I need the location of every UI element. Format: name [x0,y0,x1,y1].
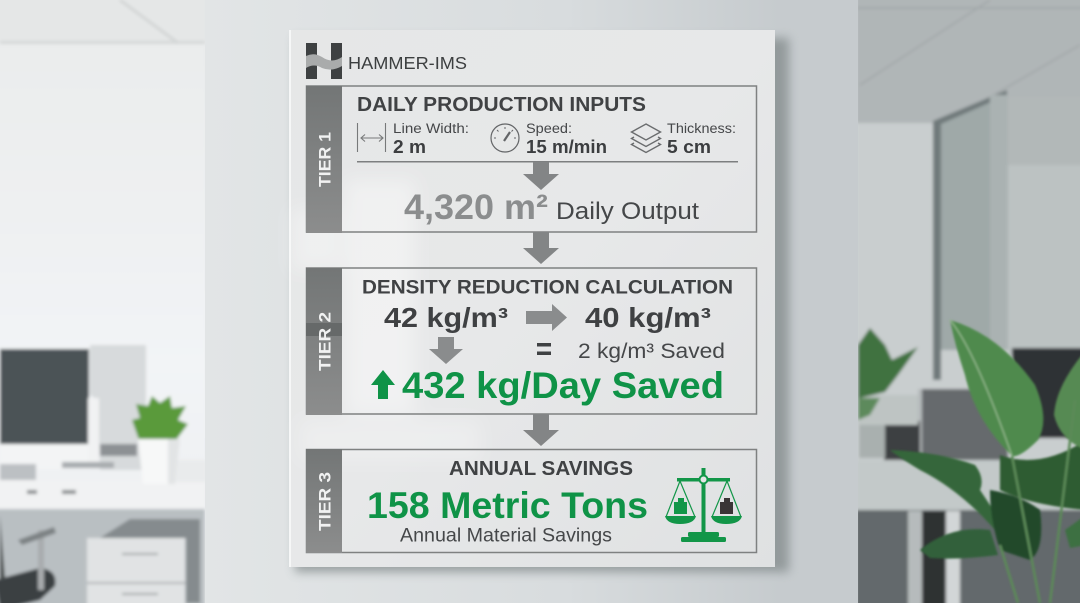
annual total: 158 Metric Tons [367,484,648,526]
logo mark [306,43,342,79]
input: thickness [632,121,736,157]
arrow: density down to daily saving [429,337,463,364]
input: thickness: 5 cm [667,137,711,157]
arrow: inputs to output [523,162,559,190]
panel: tier 1 daily production inputs [306,86,756,233]
density after: 40 kg/m³ [585,302,711,333]
panel: tier 3 annual savings [306,449,756,553]
sign panel [289,30,775,567]
daily saving: 432 kg/Day Saved [402,364,724,406]
input: speed: 15 m/min [526,137,607,157]
daily output figure: Daily Output [556,198,699,225]
tier 3 side label [306,449,342,553]
annual caption: Annual Material Savings [400,524,612,546]
arrow: tier 2 to tier 3 [523,414,559,446]
tier 3 heading: ANNUAL SAVINGS [449,457,633,480]
tier 2 side label: TIER 2 [316,312,334,371]
tier 2 heading: DENSITY REDUCTION CALCULATION [362,276,733,298]
tier 1 side label [306,86,342,233]
left office room [0,0,207,603]
tier 1 side label: TIER 1 [316,132,334,187]
input: thickness: Thickness: [667,121,736,136]
density before: 42 kg/m³ [384,302,508,333]
tier 1 heading: DAILY PRODUCTION INPUTS [357,93,646,116]
input: speed [491,121,607,157]
icon: width arrows [358,123,386,152]
arrow: density before to after [526,304,567,331]
daily output figure [404,188,699,227]
input: line width: 2 m [393,137,426,157]
daily output figure: 4,320 m² [404,188,548,227]
tier 3 side label: TIER 3 [316,472,334,531]
arrow: tier 1 to tier 2 [523,232,559,264]
foreground plant [890,320,1080,603]
logo wordmark: HAMMER-IMS [348,53,467,73]
input: speed: Speed: [526,121,572,136]
right office room [856,0,1080,603]
input: line width [358,121,469,157]
panel shadow [295,38,789,572]
icon: balance scale [665,468,742,542]
logo: HAMMER-IMS [306,43,467,79]
tier 2 side label [306,268,342,415]
glass reflection [292,180,480,460]
panel: tier 2 density reduction [306,268,756,415]
icon: stacked layers [632,124,660,152]
input: line width: Line Width: [393,121,469,136]
icon: up arrow [371,370,395,399]
density saved: 2 kg/m³ Saved [578,340,725,363]
icon: speedometer [491,124,519,152]
equals sign [537,343,551,355]
wall column [205,0,858,603]
